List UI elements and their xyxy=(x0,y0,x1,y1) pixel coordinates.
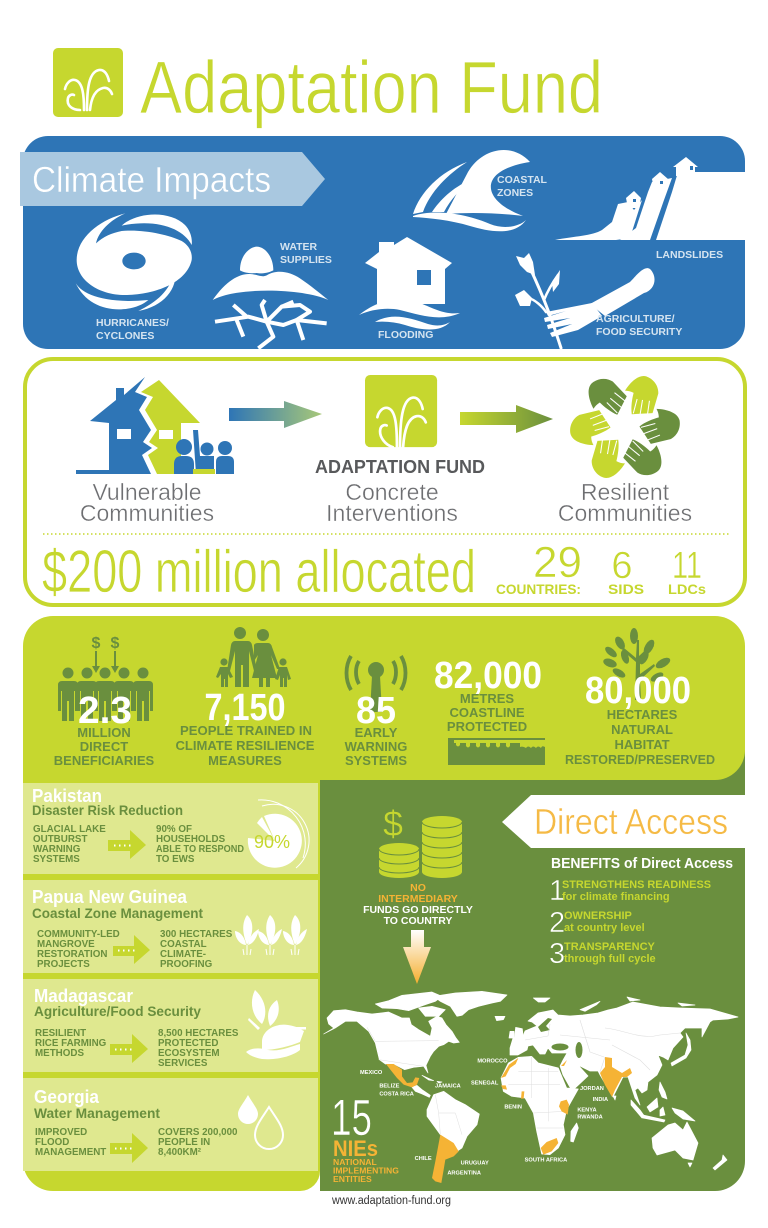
icon: people with funds: $ xyxy=(111,635,120,652)
stat: people trained xyxy=(176,627,315,768)
labels: countries: JORDAN xyxy=(580,1086,604,1092)
labels: countries: BENIN xyxy=(504,1104,522,1110)
labels: countries: JAMAICA xyxy=(435,1084,461,1090)
text: benefits: through full cycle xyxy=(564,953,656,965)
card: Pakistan: Disaster Risk Reduction xyxy=(32,802,183,818)
stat: people trained: MEASURES xyxy=(208,753,282,768)
stat: 15 NIEs: IMPLEMENTING xyxy=(333,1166,399,1176)
label: coastal zones: COASTAL xyxy=(497,174,548,186)
card: Madagascar: PROTECTED xyxy=(158,1038,218,1049)
icon: tree xyxy=(602,628,672,700)
text: benefits: 2 xyxy=(549,907,565,939)
card: Papua New Guinea: 300 HECTARES xyxy=(160,929,233,940)
card: Pakistan: SYSTEMS xyxy=(33,854,80,865)
stat: 6 SIDS xyxy=(608,545,644,597)
icon: people with funds xyxy=(58,635,153,721)
card: Pakistan xyxy=(32,786,309,868)
card: Papua New Guinea: PROOFING xyxy=(160,959,213,970)
icon: water drops xyxy=(238,1095,283,1149)
logo: adaptation fund mark xyxy=(365,375,437,447)
labels: countries: MOROCCO xyxy=(477,1058,508,1064)
panel: climate impacts xyxy=(20,136,745,349)
stat: hectares: NATURAL xyxy=(611,722,673,737)
text: benefits: OWNERSHIP xyxy=(564,910,632,922)
card: Madagascar: Madagascar xyxy=(34,986,133,1006)
card: Papua New Guinea: COASTAL xyxy=(160,939,207,950)
card: Georgia: IMPROVED xyxy=(35,1127,87,1138)
icon: hand with leaves xyxy=(246,990,306,1059)
icon: coastal wave xyxy=(413,150,530,231)
text: vulnerable communities: Communities xyxy=(80,500,214,526)
stat: 15 NIEs xyxy=(331,1089,399,1184)
panel: pathway xyxy=(25,359,745,605)
stat: 29 countries xyxy=(496,538,582,597)
labels: countries: SENEGAL xyxy=(471,1080,499,1086)
text: resilient communities: Resilient xyxy=(581,479,670,505)
card: Madagascar: RESILIENT xyxy=(35,1028,86,1039)
labels: countries: INDIA xyxy=(593,1097,608,1103)
card: Papua New Guinea: RESTORATION xyxy=(37,949,107,960)
card: Georgia: FLOOD xyxy=(35,1137,69,1148)
stat: beneficiaries xyxy=(54,635,155,768)
stat: 29 countries: 29 xyxy=(533,538,582,587)
text: concrete interventions: Concrete xyxy=(345,479,439,505)
logo xyxy=(53,48,123,117)
stat: 200 million allocated: $200 million allocated xyxy=(42,538,476,605)
stat: 15 NIEs: ENTITIES xyxy=(333,1174,372,1184)
text: benefits: TRANSPARENCY xyxy=(564,941,656,953)
icon: 90 percent pie: 90% xyxy=(254,832,290,852)
card: Madagascar: 8,500 HECTARES xyxy=(158,1028,239,1039)
icon: mangrove sprouts xyxy=(235,915,307,955)
card: Papua New Guinea: Papua New Guinea xyxy=(32,887,188,907)
labels: countries: URUGUAY xyxy=(461,1160,489,1166)
text: no intermediary: NO xyxy=(410,882,426,894)
heading: adaptation fund: ADAPTATION FUND xyxy=(315,457,485,477)
card: Papua New Guinea: CLIMATE- xyxy=(160,949,206,960)
stat: beneficiaries: 2.3 xyxy=(78,690,132,732)
text: benefits: 3 xyxy=(549,938,565,970)
card: Pakistan: WARNING xyxy=(33,844,81,855)
stat: people trained: CLIMATE RESILIENCE xyxy=(176,738,315,753)
icon: broken house xyxy=(76,377,234,474)
stat: 15 NIEs: NATIONAL xyxy=(333,1157,377,1167)
card: Georgia: Georgia xyxy=(34,1087,100,1107)
labels: countries xyxy=(360,1058,608,1176)
arrow: vulnerable to fund xyxy=(229,401,322,428)
labels: countries: KENYA xyxy=(577,1108,597,1114)
card: Madagascar: METHODS xyxy=(35,1048,84,1059)
text: benefits: at country level xyxy=(564,922,645,934)
stat: coastline xyxy=(434,655,545,765)
text: benefits: STRENGTHENS READINESS xyxy=(562,879,711,891)
text: no intermediary xyxy=(363,882,473,927)
stat: early warning xyxy=(345,656,407,768)
arrow: funds down xyxy=(403,930,431,984)
text: benefits: BENEFITS of Direct Access xyxy=(551,856,733,872)
card: Georgia: 8,400KM² xyxy=(158,1147,202,1158)
stat: hectares xyxy=(565,628,715,767)
card: Madagascar: RICE FARMING xyxy=(35,1038,107,1049)
icon: hurricane xyxy=(75,213,192,311)
icon: agriculture xyxy=(515,253,655,348)
text: resilient communities: Communities xyxy=(558,500,692,526)
text: no intermediary: TO COUNTRY xyxy=(384,915,452,927)
stat: people trained: 7,150 xyxy=(204,687,286,729)
stat: hectares: RESTORED/PRESERVED xyxy=(565,752,715,767)
card: Pakistan: HOUSEHOLDS xyxy=(156,834,226,845)
labels: countries: COSTA RICA xyxy=(379,1092,414,1098)
icon: coin stacks xyxy=(379,803,462,878)
card: Georgia xyxy=(34,1087,283,1163)
world map xyxy=(324,991,738,1183)
card: Madagascar: SERVICES xyxy=(158,1058,208,1069)
text: concrete interventions: Interventions xyxy=(326,500,458,526)
stat: 29 countries: COUNTRIES: xyxy=(496,581,581,597)
labels: countries: MEXICO xyxy=(360,1070,383,1076)
card: Georgia: MANAGEMENT xyxy=(35,1147,106,1158)
labels: countries: SOUTH AFRICA xyxy=(525,1158,567,1164)
icon: flooding house xyxy=(359,237,460,330)
text: benefits: 1 xyxy=(549,875,565,907)
heading: climate impacts: Climate Impacts xyxy=(32,159,271,200)
land: americas xyxy=(324,991,507,1183)
card: Pakistan: OUTBURST xyxy=(33,834,87,845)
label: hurricanes: CYCLONES xyxy=(96,330,154,342)
stat: hectares: 80,000 xyxy=(585,670,691,712)
panel: results background xyxy=(23,616,745,1191)
labels: countries: RWANDA xyxy=(577,1114,603,1120)
label: agriculture: AGRICULTURE/ xyxy=(596,313,675,325)
stat: beneficiaries: DIRECT xyxy=(80,739,128,754)
icon: 90 percent pie xyxy=(248,800,309,868)
heading: direct access xyxy=(502,795,745,848)
stat: early warning: WARNING xyxy=(345,739,407,754)
stat: hectares: HABITAT xyxy=(614,737,670,752)
arrow xyxy=(110,1133,148,1163)
stat: beneficiaries: MILLION xyxy=(77,725,131,740)
text: vulnerable communities: Vulnerable xyxy=(92,479,202,505)
icon: signal tower xyxy=(346,656,406,712)
labels: countries: ARGENTINA xyxy=(447,1170,481,1176)
heading: climate impacts xyxy=(20,152,325,206)
icon: sea wall xyxy=(448,738,545,765)
card: Papua New Guinea: COMMUNITY-LED xyxy=(37,929,120,940)
stat: 6 SIDS: SIDS xyxy=(608,581,644,597)
stat: 6 SIDS: 6 xyxy=(611,545,633,587)
land: eurasia and oceania xyxy=(510,997,738,1170)
label: hurricanes: HURRICANES/ xyxy=(96,317,169,329)
card: Pakistan: ABLE TO RESPOND xyxy=(156,844,244,855)
card: Pakistan: 90% OF xyxy=(156,824,192,835)
title: Adaptation Fund xyxy=(140,46,603,129)
card: Papua New Guinea: Coastal Zone Management xyxy=(32,905,203,921)
land: africa and europe xyxy=(495,998,600,1155)
arrow xyxy=(110,1034,148,1063)
text: benefits xyxy=(549,856,733,970)
stat: people trained: PEOPLE TRAINED IN xyxy=(180,723,312,738)
label: coastal zones: ZONES xyxy=(497,187,533,199)
text: no intermediary: FUNDS GO DIRECTLY xyxy=(363,904,473,916)
stat: early warning: 85 xyxy=(356,690,396,732)
label: water supplies: WATER xyxy=(280,241,318,253)
label: agriculture: FOOD SECURITY xyxy=(596,326,682,338)
icon: ring of hands xyxy=(565,371,685,483)
icon: family xyxy=(216,627,291,687)
card: Madagascar: ECOSYSTEM xyxy=(158,1048,220,1059)
stat: coastline: PROTECTED xyxy=(447,719,527,734)
stat: 15 NIEs: NIEs xyxy=(333,1136,378,1161)
stat: 15 NIEs: 15 xyxy=(331,1089,372,1146)
stat: coastline: METRES xyxy=(460,691,514,706)
heading: direct access: Direct Access xyxy=(534,801,728,842)
stat: early warning: SYSTEMS xyxy=(345,753,407,768)
labels: countries: BELIZE xyxy=(379,1084,400,1090)
icon: landslides xyxy=(555,157,745,240)
card: Madagascar xyxy=(34,986,306,1069)
icon: coin stacks: $ xyxy=(383,803,403,844)
card: Madagascar: Agriculture/Food Security xyxy=(34,1003,201,1019)
card: Pakistan: Pakistan xyxy=(32,786,102,806)
card: Papua New Guinea xyxy=(32,887,307,970)
card: Georgia: PEOPLE IN xyxy=(158,1137,210,1148)
text: benefits: for climate financing xyxy=(562,891,670,903)
label: water supplies: SUPPLIES xyxy=(280,254,332,266)
stat: hectares: HECTARES xyxy=(607,707,678,722)
footer url: www.adaptation-fund.org xyxy=(331,1195,451,1207)
card: Georgia: Water Management xyxy=(34,1105,160,1121)
card: Papua New Guinea: MANGROVE xyxy=(37,939,95,950)
card: Georgia: COVERS 200,000 xyxy=(158,1127,238,1138)
card: Papua New Guinea: PROJECTS xyxy=(37,959,90,970)
stat: coastline: 82,000 xyxy=(434,655,542,697)
stat: early warning: EARLY xyxy=(355,725,398,740)
stat: beneficiaries: BENEFICIARIES xyxy=(54,753,155,768)
card: Pakistan: TO EWS xyxy=(156,854,195,865)
label: landslides: LANDSLIDES xyxy=(656,249,723,261)
arrow: fund to resilient xyxy=(460,405,553,433)
stat: 11 LDCs xyxy=(668,545,706,597)
arrow xyxy=(113,935,150,964)
text: no intermediary: INTERMEDIARY xyxy=(378,893,458,905)
icon: people with funds: $ xyxy=(92,635,101,652)
label: flooding: FLOODING xyxy=(378,329,433,341)
stat: 11 LDCs: 11 xyxy=(672,545,702,587)
arrow xyxy=(108,830,146,859)
stat: coastline: COASTLINE xyxy=(449,705,525,720)
icon: water supplies xyxy=(213,247,328,348)
stat: 11 LDCs: LDCs xyxy=(668,581,706,597)
labels: countries: CHILE xyxy=(415,1156,432,1162)
card: Pakistan: GLACIAL LAKE xyxy=(33,824,106,835)
